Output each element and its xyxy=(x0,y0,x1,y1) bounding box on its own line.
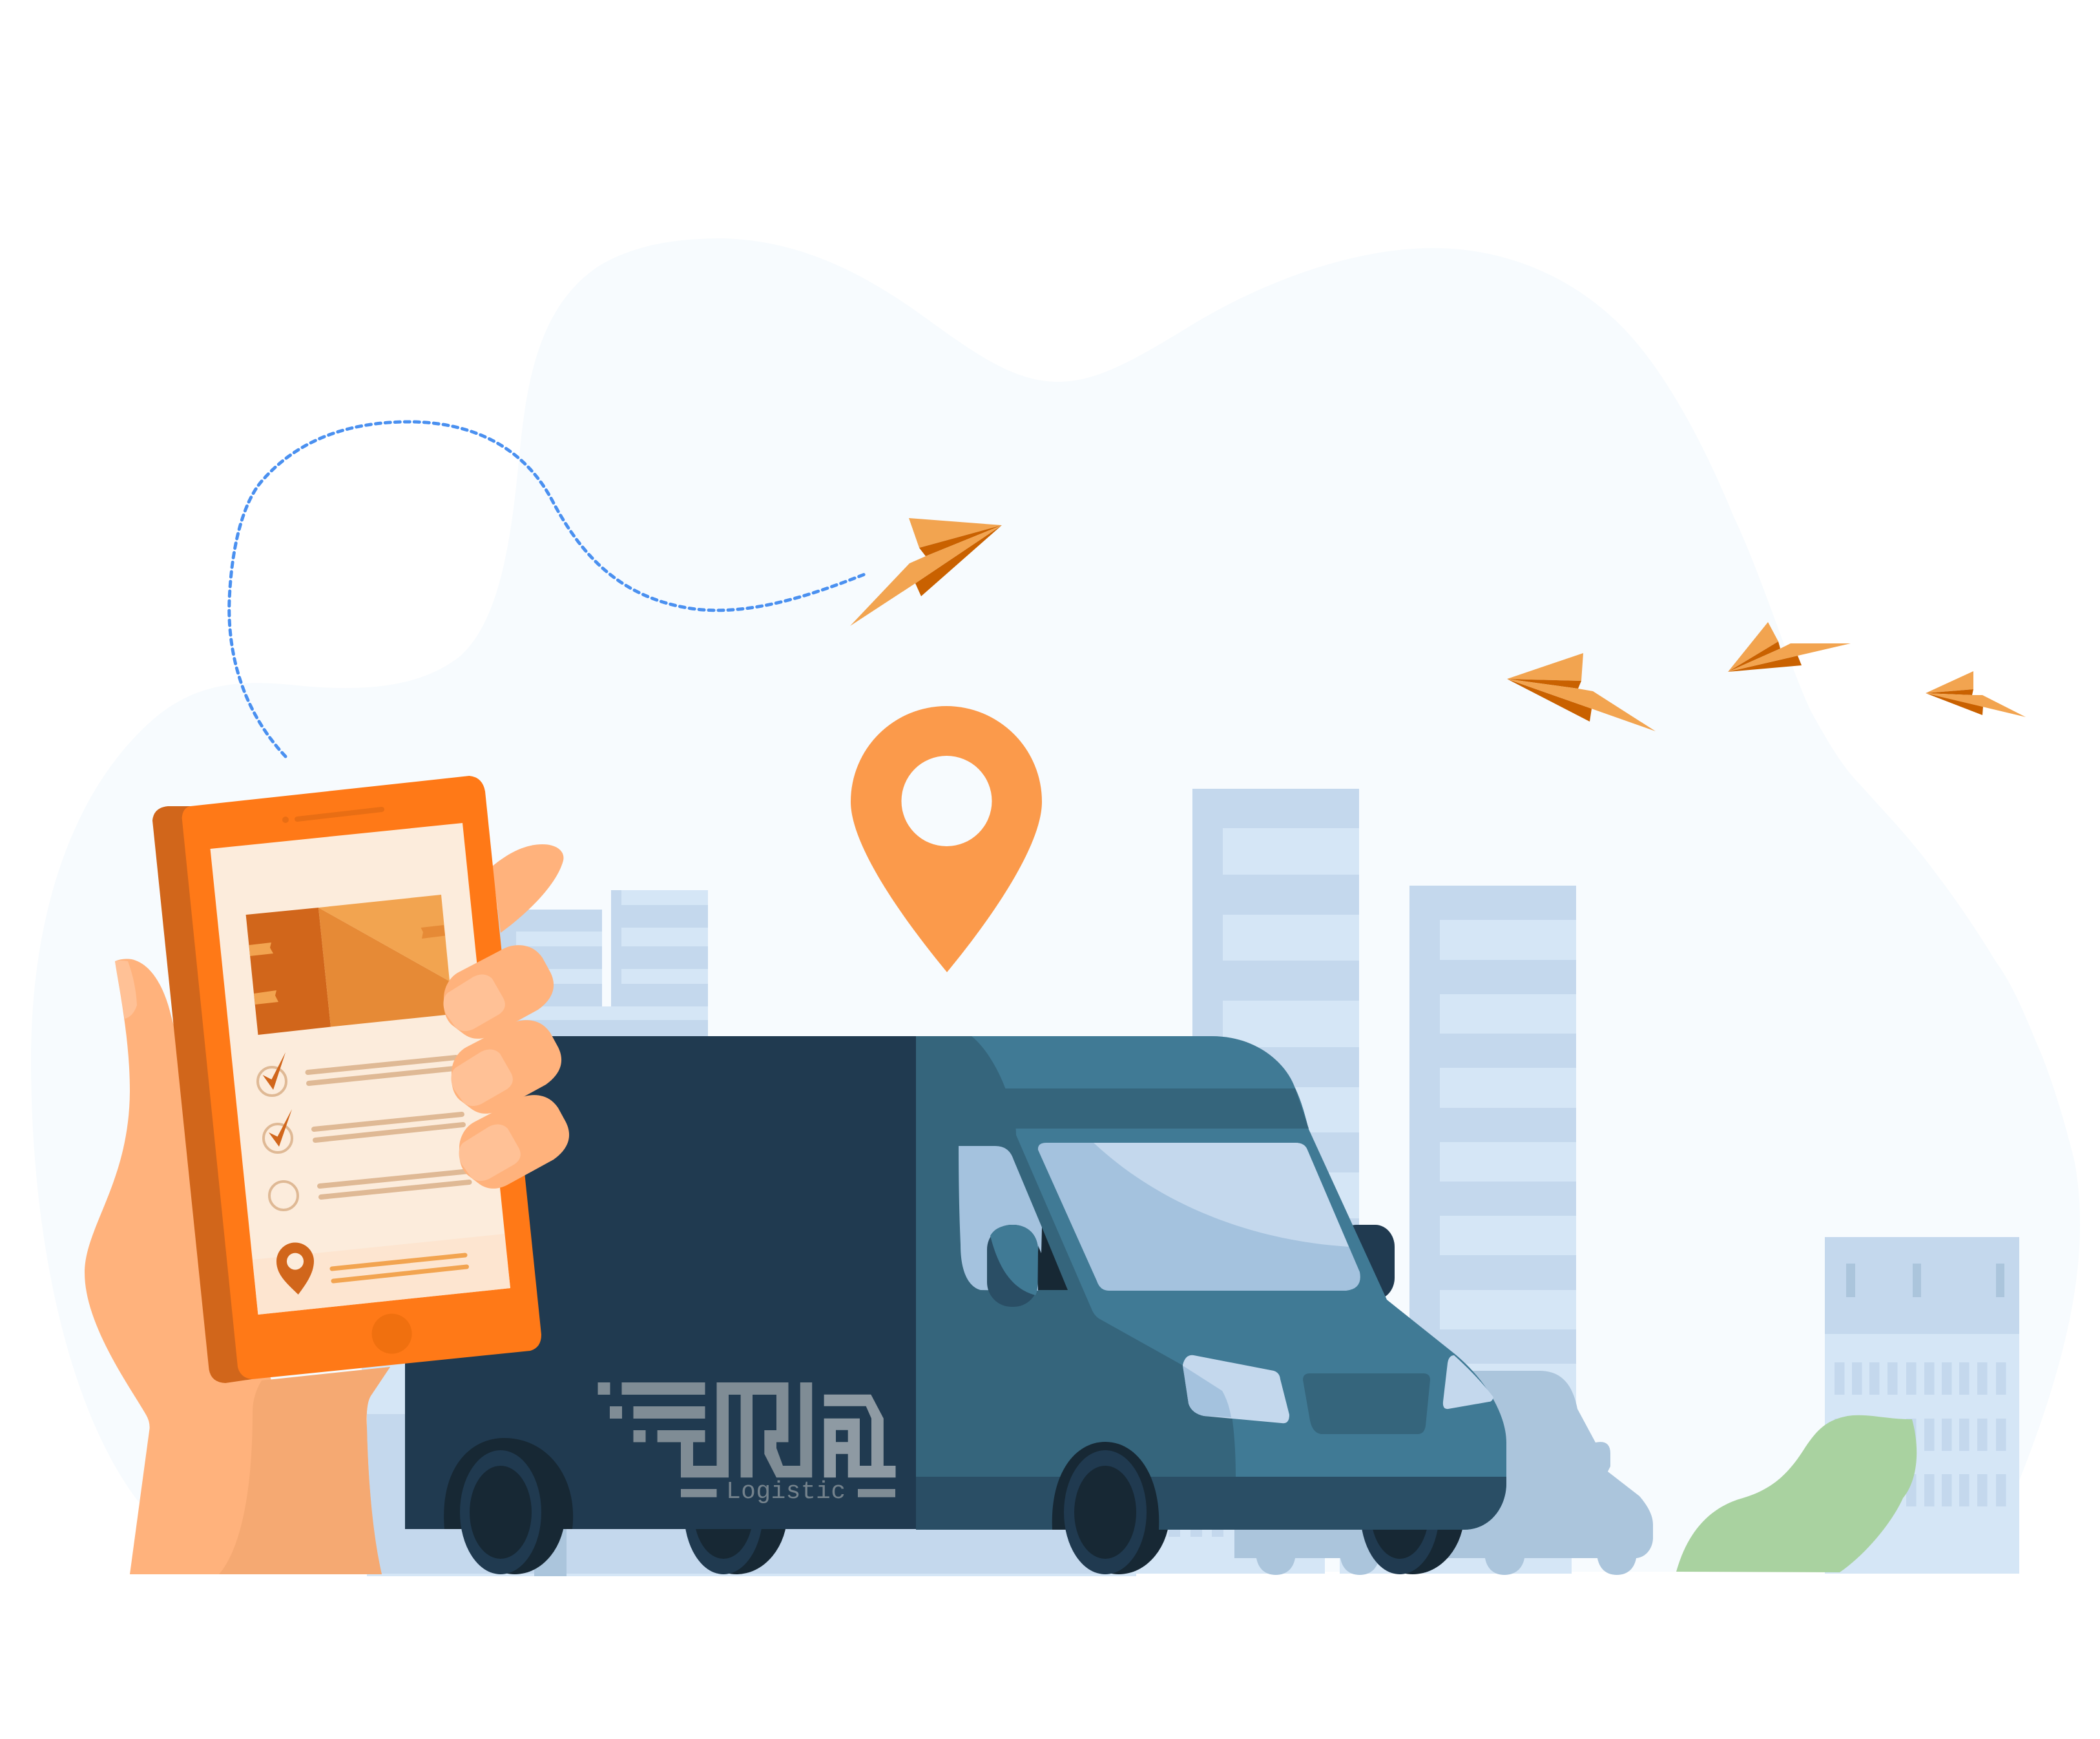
finger 2 xyxy=(451,1020,561,1114)
shadow truck silhouette xyxy=(1234,1371,1653,1575)
checklist row 1 xyxy=(258,1052,456,1096)
screen bottom strip xyxy=(253,1234,510,1315)
cab shaded side xyxy=(916,1036,1236,1477)
phone screen xyxy=(211,823,510,1315)
building: small top block xyxy=(611,890,708,1006)
location pin xyxy=(851,706,1042,972)
building: right block xyxy=(1825,1237,2019,1574)
paper plane 1 xyxy=(850,518,1002,626)
phone home button xyxy=(372,1314,412,1354)
building: second tower xyxy=(1340,886,1576,1574)
leaf bush xyxy=(1676,1415,1917,1572)
hand behind phone xyxy=(85,844,563,1574)
building: tall left tower xyxy=(1192,789,1359,1435)
truck cab body xyxy=(916,1036,1506,1530)
phone speaker xyxy=(282,809,382,823)
rear right wheel xyxy=(1360,1450,1464,1574)
left wheel rear tire xyxy=(464,1450,565,1574)
front wheel xyxy=(1052,1442,1159,1574)
ground buildings behind truck xyxy=(362,1357,1325,1576)
truck cargo box xyxy=(405,1036,916,1529)
right headlight xyxy=(1443,1355,1493,1409)
middle wheel xyxy=(684,1450,787,1574)
building: low base behind truck xyxy=(452,1006,708,1039)
checklist row 2 xyxy=(264,1109,463,1152)
dashed flight path xyxy=(229,422,866,756)
paper plane 4 xyxy=(1926,671,2026,717)
screen location row xyxy=(276,1242,466,1295)
finger 3 xyxy=(459,1095,569,1189)
right side mirror xyxy=(1337,1225,1395,1300)
left side mirror xyxy=(987,1225,1038,1307)
package image xyxy=(246,895,452,1035)
grille xyxy=(1303,1373,1430,1434)
checklist row 3 xyxy=(269,1171,469,1210)
paper plane 2 xyxy=(1507,653,1656,731)
truck logo: Logistic xyxy=(726,1478,846,1506)
cab visor band xyxy=(995,1088,1309,1129)
left headlight xyxy=(1183,1355,1289,1423)
paper plane 3 xyxy=(1728,622,1851,672)
front wheel rear tire xyxy=(1068,1450,1170,1574)
finger 1 xyxy=(443,945,554,1039)
building: small left block xyxy=(452,910,602,1006)
phone xyxy=(152,776,541,1383)
cab bumper band xyxy=(916,1477,1506,1530)
rear left wheel xyxy=(444,1438,573,1574)
truck logo xyxy=(598,1382,895,1506)
windshield xyxy=(1038,1143,1360,1291)
background blob xyxy=(31,238,2080,1572)
side window xyxy=(959,1146,1068,1291)
